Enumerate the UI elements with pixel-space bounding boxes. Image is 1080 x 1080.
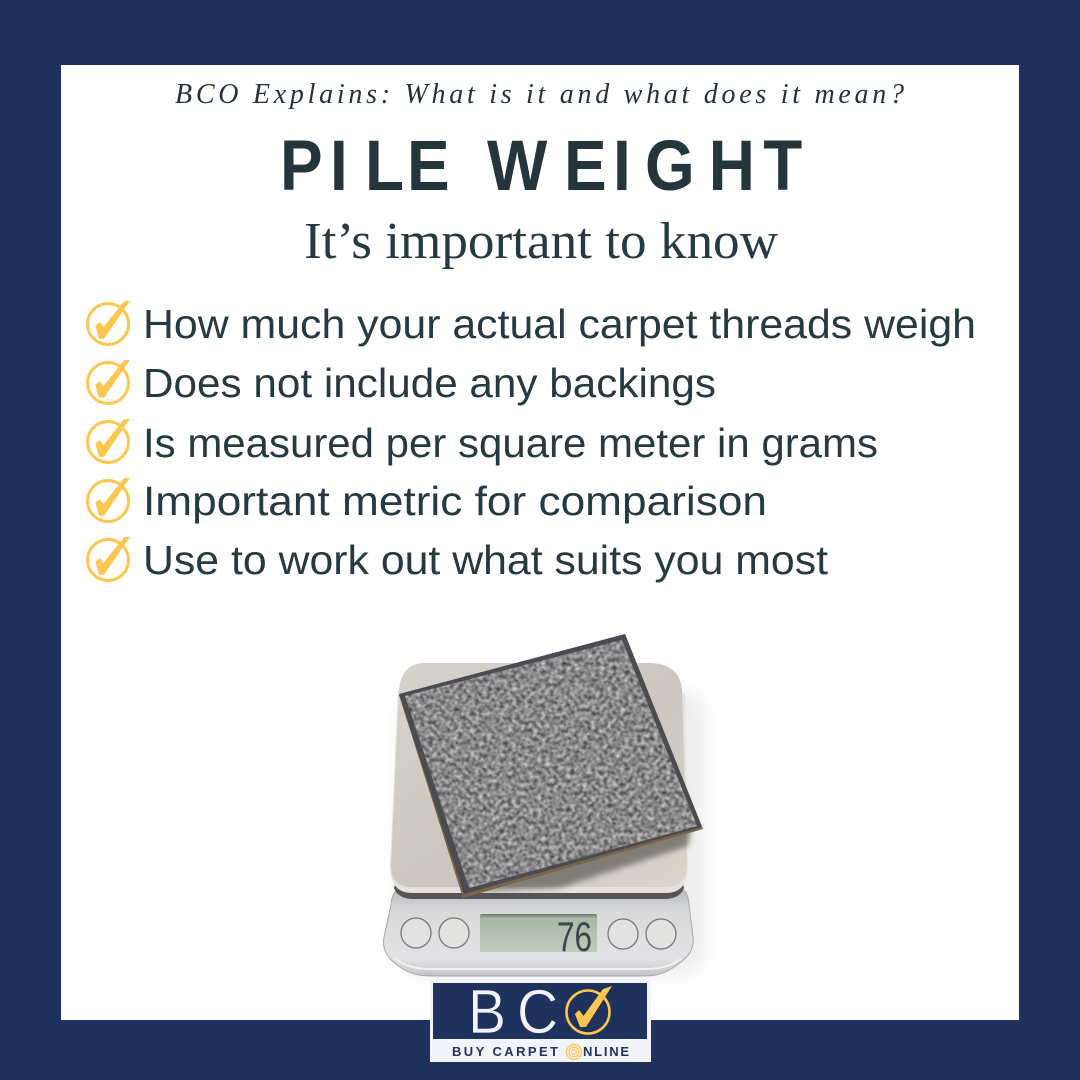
logo spiral O	[566, 1044, 582, 1060]
icon: check 1	[88, 301, 130, 344]
LCD display	[480, 914, 597, 952]
logo	[430, 977, 651, 1062]
button 3	[608, 919, 638, 949]
logo check icon	[566, 986, 612, 1034]
carpet backing	[399, 634, 703, 898]
subtitle: It’s important to know	[304, 213, 778, 270]
carpet border	[399, 634, 702, 894]
item 4: Important metric for comparison	[143, 478, 767, 524]
logo navy field	[433, 983, 647, 1039]
scale base	[384, 890, 693, 976]
logo tagline: BUY CARPET	[452, 1044, 558, 1059]
button 4	[646, 919, 676, 949]
scale shadow	[400, 690, 705, 975]
checklist	[88, 301, 976, 583]
title: PILE WEIGHT	[280, 127, 802, 206]
icon: check 3	[88, 419, 130, 462]
white panel	[61, 65, 1019, 1020]
button 1	[401, 918, 431, 948]
plate underside gap	[394, 880, 684, 899]
item 2: Does not include any backings	[143, 360, 716, 406]
illustration: carpet sample on kitchen scale	[384, 634, 705, 976]
carpet shadow	[470, 826, 692, 892]
LCD reading: 76	[557, 913, 592, 960]
button 2	[439, 918, 469, 948]
logo plate	[430, 978, 651, 1062]
item 3: Is measured per square meter in grams	[143, 420, 878, 466]
logo letters: BC	[468, 977, 558, 1047]
item 5: Use to work out what suits you most	[143, 537, 829, 583]
scale top plate	[391, 663, 687, 887]
item 1: How much your actual carpet threads weigh	[143, 301, 976, 347]
kicker heading: BCO Explains: What is it and what does it mean?	[175, 79, 904, 110]
icon: check 2	[88, 360, 130, 404]
logo tagline end: NLINE	[583, 1044, 629, 1059]
base front highlight	[396, 959, 681, 969]
icon: check 5	[88, 537, 130, 580]
icon: check 4	[88, 478, 130, 522]
carpet texture	[400, 635, 700, 895]
carpet pile	[405, 640, 697, 888]
plate rim	[390, 690, 688, 893]
